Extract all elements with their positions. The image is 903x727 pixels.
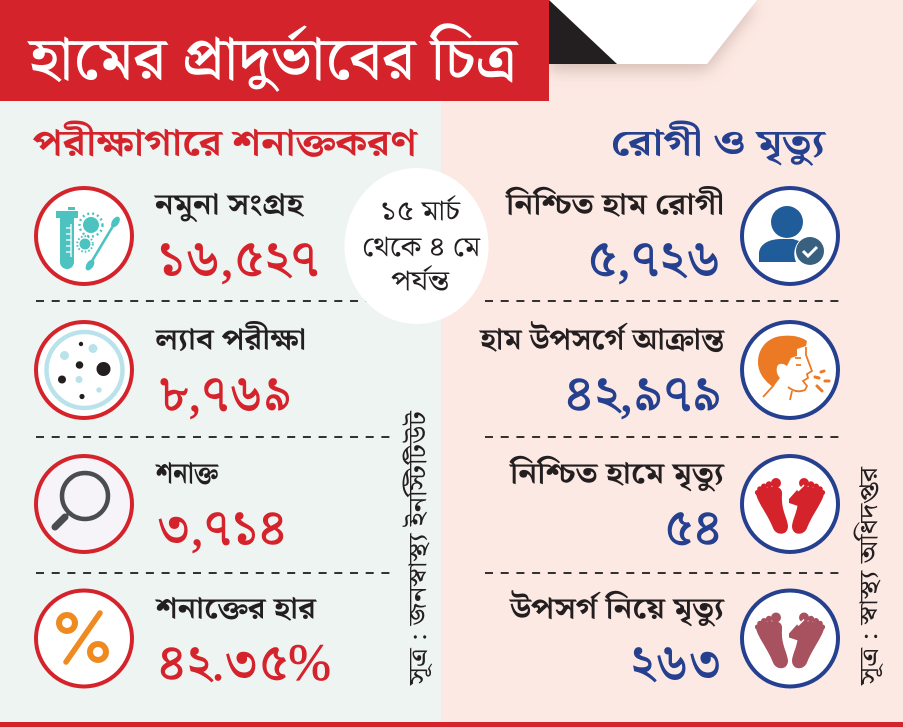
panel: left background — [0, 101, 441, 727]
heading: laboratory detection: পরীক্ষাগারে শনাক্তকরণ — [33, 120, 419, 164]
heading: patients and deaths: রোগী ও মৃত্যু — [611, 120, 827, 166]
icon: confirmed patient — [742, 188, 838, 284]
value: deaths with symptoms: ২৬৩ — [630, 635, 722, 692]
title banner — [0, 0, 549, 101]
label: samples collected: নমুনা সংগ্রহ — [153, 188, 305, 223]
value: samples collected: ১৬,৫২৭ — [157, 231, 319, 288]
date badge: পর্যন্ত — [391, 264, 451, 297]
date badge: ১৫ মার্চ — [380, 194, 462, 227]
label: lab tests: ল্যাব পরীক্ষা — [154, 320, 306, 356]
label: confirmed measles patients: নিশ্চিত হাম রোগী — [504, 185, 724, 221]
icon: test tube, virus and swab — [36, 188, 132, 284]
label: deaths with symptoms: উপসর্গ নিয়ে মৃত্যু — [508, 589, 726, 628]
icon: petri dish — [36, 322, 132, 418]
value: detection rate: ৪২.৩৫% — [157, 635, 331, 692]
value: measles symptoms: ৪২,৯৭৯ — [564, 366, 722, 423]
label: detection rate: শনাক্তের হার — [154, 592, 318, 625]
dividers — [36, 301, 843, 573]
value: detected: ৩,৭১৪ — [157, 500, 287, 557]
title banner: হামের প্রাদুর্ভাবের চিত্র — [27, 24, 519, 92]
value: confirmed measles deaths: ৫৪ — [664, 500, 722, 557]
value: lab tests: ৮,৭৬৯ — [158, 366, 292, 423]
bottom bar — [0, 722, 903, 727]
decorative header shape — [549, 0, 757, 70]
icon: percent — [36, 590, 132, 686]
source: health directorate: সূত্র : স্বাস্থ্য অধিদপ্তর — [853, 465, 884, 686]
icon: coughing person — [742, 322, 838, 418]
icon: magnifying glass — [36, 456, 132, 552]
icon: feet with tag, symptomatic deaths — [742, 590, 838, 686]
label: detected: শনাক্ত — [154, 457, 219, 490]
panel: right background — [441, 0, 903, 727]
label: confirmed measles deaths: নিশ্চিত হামে মৃত্যু — [508, 454, 726, 493]
date badge — [344, 168, 488, 324]
source: public health institute: সূত্র : জনস্বাস্থ্য ইনস্টিটিউট — [402, 410, 433, 686]
icon: feet with tag, confirmed deaths — [742, 456, 838, 552]
label: measles symptoms: হাম উপসর্গে আক্রান্ত — [478, 320, 726, 356]
value: confirmed measles patients: ৫,৭২৬ — [587, 231, 721, 288]
date badge: থেকে ৪ মে — [362, 232, 482, 263]
